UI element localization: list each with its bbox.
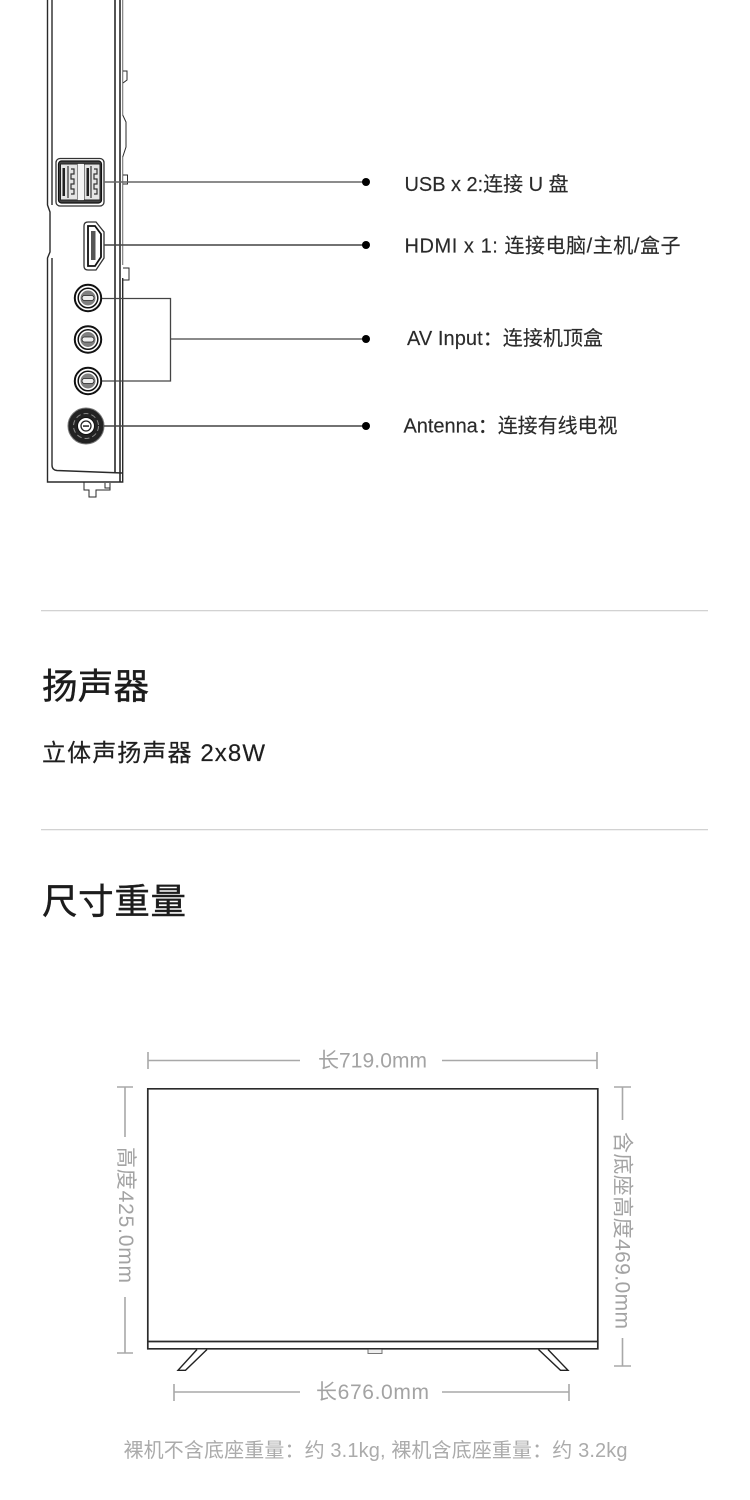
dimension: width 719.0mm: 长719.0mm (318, 1050, 427, 1072)
HDMI port (84, 222, 104, 270)
dimension: stand width 676.0mm: 长676.0mm (316, 1381, 429, 1404)
USB ports (56, 158, 104, 206)
dimension: height 425.0mm: 高度425.0mm (114, 1147, 137, 1283)
right stand leg (538, 1350, 568, 1370)
dimension: stand width 676.0mm (174, 1381, 569, 1404)
leader line: HDMI (104, 241, 370, 249)
label: USB: USB x 2:连接 U 盘 (404, 173, 568, 196)
leader bracket: AV input (102, 298, 370, 381)
left stand leg (178, 1350, 207, 1370)
dimension: width 719.0mm (148, 1050, 597, 1072)
dimension: height with stand 469.0mm: 含底座高度469.0mm (610, 1132, 634, 1329)
divider (41, 610, 708, 611)
weight note: 裸机不含底座重量：约 3.1kg, 裸机含底座重量：约 3.2kg (124, 1439, 628, 1462)
TV screen frame (148, 1089, 598, 1349)
divider (41, 829, 708, 830)
leader line: USB (104, 178, 370, 186)
heading: speakers: 扬声器 (42, 666, 149, 706)
leader line: antenna (104, 422, 370, 430)
antenna jack (68, 408, 104, 444)
center sensor tab (368, 1350, 382, 1354)
dimension: height 425.0mm (114, 1087, 137, 1353)
TV side body outline (48, 0, 129, 497)
TV front drawing (148, 1089, 598, 1370)
heading: size and weight: 尺寸重量 (42, 882, 186, 922)
label: Antenna: Antenna：连接有线电视 (404, 414, 618, 438)
TV side panel drawing with ports (48, 0, 129, 497)
label: AV Input: AV Input：连接机顶盒 (407, 327, 603, 350)
label: HDMI: HDMI x 1: 连接电脑/主机/盒子 (404, 234, 680, 258)
speaker description: 立体声扬声器 2x8W (42, 740, 265, 767)
AV input jacks (75, 285, 101, 394)
